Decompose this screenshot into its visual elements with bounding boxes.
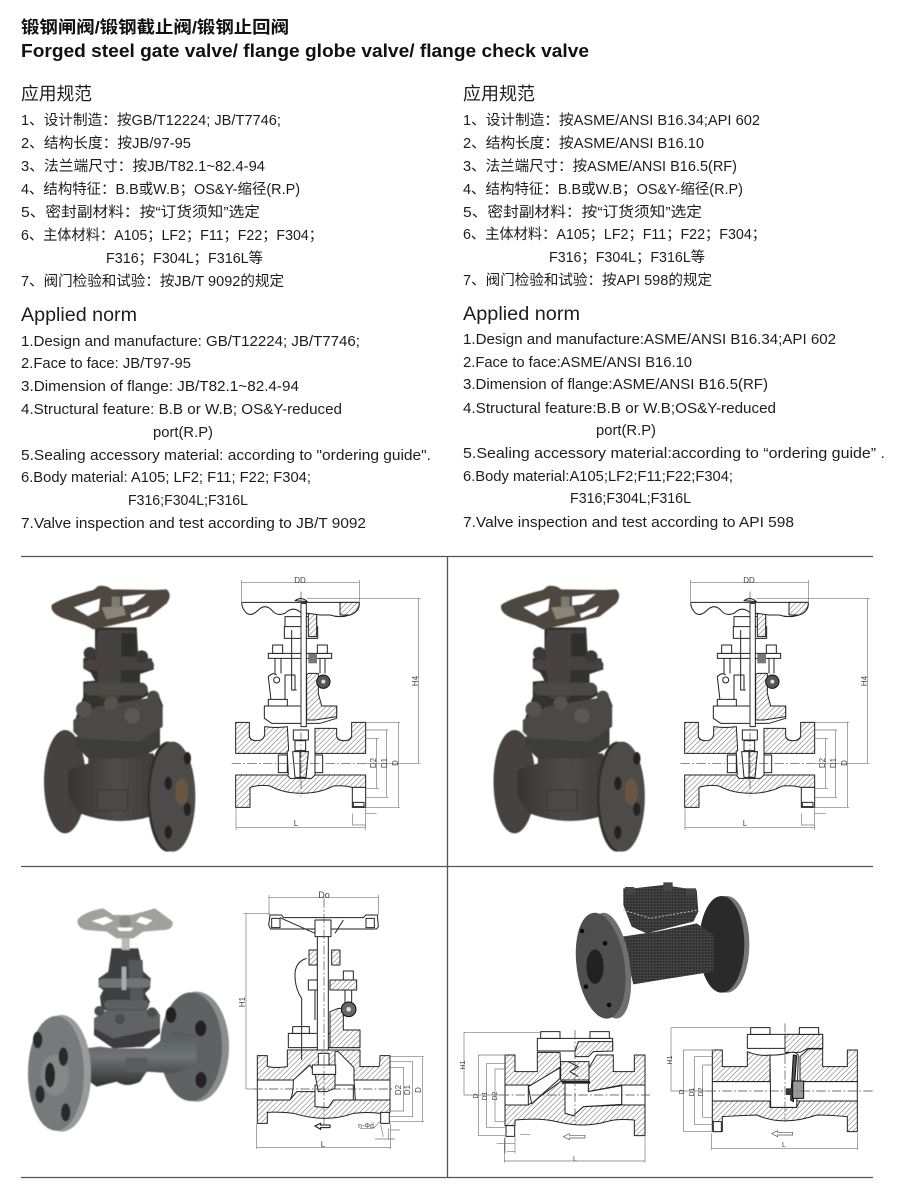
text block: left Chinese norm: 5、密封副材料：按“订货须知”选定	[21, 204, 260, 221]
text block: right English norm: 6.Body material:A105;LF2;F11;F22;F304;	[463, 469, 733, 485]
photo: forged check valve	[569, 882, 749, 1022]
diagram labels: gate valve right: D	[840, 760, 849, 766]
title: Forged steel gate valve/ flange globe valve/ flange check valve	[21, 40, 589, 61]
text block: right English norm: 5.Sealing accessory material:according to “ordering guide” .	[463, 446, 885, 462]
text block: left Chinese norm: 3、法兰端尺寸：按JB/T82.1~82.4-94	[21, 158, 265, 175]
photo: forged gate valve	[44, 586, 195, 852]
text block: right Chinese norm: 4、结构特征：B.B或W.B；OS&Y-缩径(R.P)	[463, 181, 743, 198]
text block: right English norm: port(R.P)	[596, 423, 656, 439]
text block: right Chinese norm	[463, 84, 766, 289]
panel: gate valve, left	[44, 576, 421, 852]
text block: left Chinese norm	[21, 84, 323, 290]
diagram: gate valve section copy	[681, 580, 870, 830]
diagram labels: check valve: D2	[492, 1091, 499, 1100]
text block: left English norm: 5.Sealing accessory material: according to "ordering guide".	[21, 448, 431, 464]
text block: left Chinese norm: 7、阀门检验和试验：按JB/T 9092的规定	[21, 273, 284, 290]
text block: left Chinese norm: 6、主体材料：A105；LF2；F11；F22；F304；	[21, 227, 323, 244]
text block: left Chinese norm: 2、结构长度：按JB/97-95	[21, 135, 191, 152]
diagram labels: gate valve left: D	[391, 760, 400, 766]
diagram labels: globe valve: D1	[403, 1084, 412, 1095]
diagram: check valve section A	[464, 1030, 650, 1163]
diagram labels: check valve: D	[473, 1093, 480, 1099]
text block: right Chinese norm: 1、设计制造：按ASME/ANSI B16.34;API 602	[463, 112, 760, 129]
diagram labels: globe valve	[238, 890, 423, 1149]
title	[21, 18, 589, 61]
diagram labels: gate valve right: H4	[860, 675, 869, 686]
text block: right Chinese norm: 应用规范	[463, 84, 535, 104]
diagram labels: gate valve left: D2	[369, 757, 378, 768]
diagram labels: globe valve: n-Φd	[358, 1123, 374, 1130]
text block: left English norm: 7.Valve inspection and test according to JB/T 9092	[21, 516, 366, 532]
diagram labels: gate valve right: DD	[743, 576, 755, 585]
diagram labels: check valve: D2	[698, 1087, 705, 1096]
text block: left English norm: 2.Face to face: JB/T97-95	[21, 356, 191, 372]
diagram labels: gate valve left: L	[294, 819, 299, 828]
diagram labels: check valve: D1	[689, 1087, 696, 1096]
text block: right Chinese norm: 2、结构长度：按ASME/ANSI B16.10	[463, 135, 704, 152]
text block: left English norm: 6.Body material: A105; LF2; F11; F22; F304;	[21, 470, 311, 486]
diagram labels: check valve: D1	[482, 1091, 489, 1100]
diagram labels: gate valve right: D1	[829, 757, 838, 768]
diagram labels: gate valve right	[743, 576, 869, 828]
text block: left English norm: F316;F304L;F316L	[128, 493, 248, 509]
text block: right Chinese norm: F316；F304L；F316L等	[549, 248, 705, 266]
text block: left Chinese norm: 4、结构特征：B.B或W.B；OS&Y-缩径(R.P)	[21, 181, 300, 198]
text block: left Chinese norm: F316；F304L；F316L等	[106, 249, 263, 267]
diagram labels: check valve	[460, 1055, 786, 1163]
diagram labels: gate valve left: DD	[294, 576, 306, 585]
diagram labels: globe valve: D	[414, 1087, 423, 1093]
panel: globe valve	[28, 890, 424, 1149]
panel: gate valve, right	[493, 576, 870, 852]
text block: left English norm: 3.Dimension of flange: JB/T82.1~82.4-94	[21, 379, 299, 395]
text block: right Chinese norm: 3、法兰端尺寸：按ASME/ANSI B16.5(RF)	[463, 158, 737, 175]
text block: left English norm: 4.Structural feature: B.B or W.B; OS&Y-reduced	[21, 402, 342, 418]
diagram labels: check valve: H1	[667, 1055, 674, 1064]
text block: right English norm: F316;F304L;F316L	[570, 491, 691, 507]
diagram labels: check valve: H1	[460, 1060, 467, 1069]
diagram labels: gate valve right: D2	[818, 757, 827, 768]
text block: left Chinese norm: 应用规范	[21, 84, 92, 104]
photo: forged globe valve	[28, 908, 229, 1132]
text block: right English norm	[463, 304, 885, 531]
diagram labels: gate valve left: D1	[380, 757, 389, 768]
title: 锻钢闸阀/锻钢截止阀/锻钢止回阀	[21, 18, 289, 37]
diagram: check valve section B	[671, 1023, 873, 1150]
text block: left English norm: 1.Design and manufacture: GB/T12224; JB/T7746;	[21, 334, 360, 350]
text block: right English norm: 3.Dimension of flange:ASME/ANSI B16.5(RF)	[463, 377, 768, 393]
text block: left English norm: port(R.P)	[153, 425, 213, 441]
diagram: globe valve section	[243, 895, 424, 1149]
diagram labels: check valve: D	[679, 1089, 686, 1095]
diagram labels: globe valve: Do	[318, 890, 330, 900]
diagram labels: check valve: L	[782, 1142, 786, 1149]
text block: right Chinese norm: 6、主体材料：A105；LF2；F11；F22；F304；	[463, 226, 766, 243]
text block: left Chinese norm: 1、设计制造：按GB/T12224; JB/T7746;	[21, 112, 281, 129]
text block: left English norm	[21, 305, 431, 532]
diagram labels: globe valve: H1	[238, 996, 247, 1007]
text block: right English norm: Applied norm	[463, 304, 580, 325]
text block: right Chinese norm: 5、密封副材料：按“订货须知”选定	[463, 204, 702, 221]
diagram labels: gate valve right: L	[743, 819, 748, 828]
diagram labels: check valve: L	[573, 1156, 577, 1163]
text block: left English norm: Applied norm	[21, 305, 137, 326]
diagram labels: globe valve: L	[321, 1140, 326, 1149]
panel: check valve	[460, 882, 873, 1163]
diagram labels: gate valve left	[294, 576, 420, 828]
diagram: gate valve section	[232, 580, 421, 830]
diagram labels: gate valve left: H4	[411, 675, 420, 686]
text block: right English norm: 2.Face to face:ASME/ANSI B16.10	[463, 355, 692, 371]
text block: right English norm: 7.Valve inspection and test according to API 598	[463, 515, 794, 531]
diagram labels: globe valve: D2	[394, 1084, 403, 1095]
text block: right English norm: 1.Design and manufacture:ASME/ANSI B16.34;API 602	[463, 332, 836, 348]
photo: forged gate valve copy	[493, 586, 645, 852]
text block: right Chinese norm: 7、阀门检验和试验：按API 598的规定	[463, 272, 712, 289]
text block: right English norm: 4.Structural feature:B.B or W.B;OS&Y-reduced	[463, 401, 776, 417]
